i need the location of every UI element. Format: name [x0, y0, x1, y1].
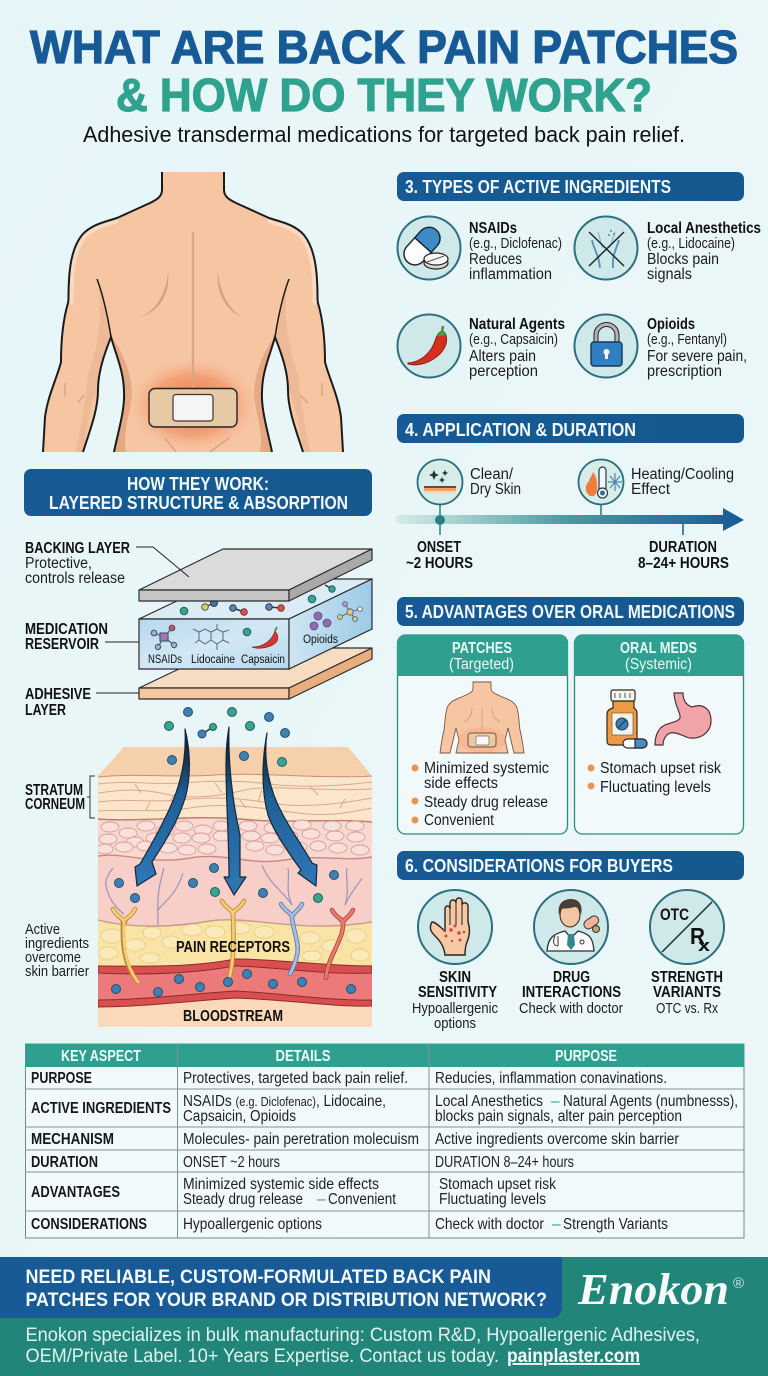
section 4 heading — [397, 414, 744, 443]
logo: Enokon: ® — [733, 1275, 744, 1292]
label: active ingredients: skin barrier — [25, 963, 89, 980]
label: duration: DURATION — [649, 539, 717, 556]
text: strength variants: STRENGTH — [651, 969, 723, 986]
molecules released — [164, 708, 290, 738]
row: active ingredients: Local Anesthetics — [435, 1093, 543, 1110]
epidermis top — [98, 747, 372, 776]
bullets: patches: Minimized systemic — [424, 760, 549, 777]
icon: OTC vs Rx: R — [690, 923, 705, 949]
medication reservoir — [139, 579, 372, 669]
text: clean dry skin: Dry Skin — [470, 481, 521, 498]
bullets: patches: Steady drug release — [424, 794, 548, 811]
label: active ingredients: overcome — [25, 949, 81, 966]
header: how they work — [24, 469, 372, 516]
title: & HOW DO THEY WORK? — [116, 69, 652, 121]
text: opioids: For severe pain, — [647, 348, 747, 365]
call to action banner — [0, 1257, 768, 1376]
text: natural agents — [469, 316, 565, 380]
label: medication reservoir — [25, 621, 108, 653]
header: how they work: LAYERED STRUCTURE & ABSORPTION — [49, 492, 348, 513]
skin cross-section: BLOODSTREAM — [183, 1008, 283, 1025]
row: active ingredients: – — [551, 1093, 560, 1110]
table header: PURPOSE — [555, 1048, 617, 1065]
row: advantages: Minimized systemic side effects — [183, 1176, 379, 1193]
title — [30, 21, 738, 121]
mini back illustration — [440, 682, 524, 753]
label: duration — [638, 539, 729, 572]
CTA body: Enokon specializes in bulk manufacturing: Custom R&D, Hypoallergenic Adhesives, — [26, 1325, 700, 1346]
text: drug interactions: INTERACTIONS — [522, 984, 621, 1001]
icon: NSAID pills — [398, 216, 460, 280]
icon: hand with rash — [418, 890, 492, 964]
section 3 heading — [397, 172, 744, 201]
label: backing layer: BACKING LAYER — [25, 540, 130, 557]
label: active ingredients: Active — [25, 921, 60, 938]
arrow: absorption left — [135, 729, 189, 886]
text: natural agents: (e.g., Capsaicin) — [469, 331, 558, 348]
icon: blocked nerves — [574, 216, 638, 280]
bullets: oral meds: Stomach upset risk — [600, 760, 721, 777]
row: considerations — [31, 1216, 668, 1233]
text: NSAIDs: inflammation — [469, 266, 552, 283]
summary table — [25, 1044, 744, 1238]
text: opioids: prescription — [647, 363, 722, 380]
icon: NSAID molecule — [151, 625, 177, 650]
label: stratum corneum: CORNEUM — [25, 796, 85, 813]
icon: heating and cooling — [578, 460, 624, 504]
arrow: absorption right — [263, 733, 317, 886]
row: mechanism: MECHANISM — [31, 1131, 114, 1148]
label: duration: 8–24+ HOURS — [638, 555, 729, 572]
panel: oral meds: ORAL MEDS — [620, 640, 697, 657]
cell layer — [97, 819, 372, 862]
label: stratum corneum: STRATUM — [25, 782, 83, 799]
icon: pill bottle — [607, 690, 647, 748]
text: drug interactions: Check with doctor — [519, 1000, 623, 1017]
icon: OTC vs Rx: OTC — [660, 905, 689, 924]
panel: patches — [397, 635, 568, 834]
text: strength variants: VARIANTS — [653, 984, 721, 1001]
text: NSAIDs — [469, 220, 562, 283]
label: medication reservoir: RESERVOIR — [25, 636, 99, 653]
fat layer — [98, 919, 372, 966]
bullets: oral meds — [588, 760, 721, 796]
CTA heading: PATCHES FOR YOUR BRAND OR DISTRIBUTION NETWORK? — [26, 1290, 547, 1311]
medication reservoir: Capsaicin — [241, 654, 285, 666]
row: active ingredients: Natural Agents (numbnesss), — [563, 1093, 738, 1110]
label: onset: ~2 HOURS — [406, 555, 473, 572]
icon: clean dry skin — [418, 460, 462, 504]
text: skin sensitivity: SKIN — [439, 969, 471, 986]
title: WHAT ARE BACK PAIN PATCHES — [30, 21, 738, 73]
panel: patches: (Targeted) — [449, 656, 514, 673]
label: adhesive layer: LAYER — [25, 702, 66, 719]
table header — [26, 1044, 744, 1067]
bullets: oral meds: Fluctuating levels — [600, 779, 711, 796]
row: mechanism: Molecules- pain peretration molecuism — [183, 1131, 419, 1148]
text: drug interactions: DRUG — [553, 969, 590, 986]
icon: chili pepper — [398, 314, 460, 378]
row: duration: ONSET ~2 hours — [183, 1154, 280, 1171]
CTA heading: NEED RELIABLE, CUSTOM-FORMULATED BACK PAIN — [26, 1267, 491, 1288]
label: stratum corneum — [25, 776, 95, 818]
row: advantages: Stomach upset risk — [439, 1176, 556, 1193]
text: natural agents: Natural Agents — [469, 316, 565, 333]
row: advantages — [31, 1176, 556, 1208]
medication reservoir: Opioids — [303, 634, 338, 646]
logo: Enokon: Enokon — [577, 1265, 729, 1314]
text: skin sensitivity — [412, 969, 498, 1032]
icon: doctor — [534, 890, 608, 964]
icon: OTC vs Rx: x — [698, 936, 711, 955]
row: active ingredients — [31, 1093, 738, 1125]
text: opioids: Opioids — [647, 316, 695, 333]
section 6 heading: 6. CONSIDERATIONS FOR BUYERS — [405, 855, 673, 876]
row: purpose: PURPOSE — [31, 1070, 92, 1087]
CTA body — [26, 1325, 700, 1367]
row: mechanism: Active ingredients overcome skin barrier — [435, 1131, 679, 1148]
text: skin sensitivity: options — [434, 1015, 476, 1032]
text: opioids — [647, 316, 747, 380]
row: duration: DURATION 8–24+ hours — [435, 1154, 574, 1171]
text: natural agents: perception — [469, 363, 538, 380]
molecules in skin — [112, 752, 356, 996]
text: heating cooling: Effect — [631, 481, 671, 498]
row: advantages: Convenient — [328, 1191, 397, 1208]
timeline arrow — [396, 505, 744, 535]
text: NSAIDs: Reduces — [469, 251, 522, 268]
row: active ingredients: Capsaicin, Opioids — [183, 1108, 296, 1125]
header: how they work: HOW THEY WORK: — [127, 473, 269, 494]
icon: stomach — [655, 693, 711, 745]
adhesive layer — [139, 648, 372, 699]
label: backing layer: controls release — [25, 570, 125, 587]
blood vessel — [98, 959, 372, 1030]
label: adhesive layer — [25, 686, 91, 719]
text: strength variants — [651, 969, 723, 1017]
label: adhesive layer: ADHESIVE — [25, 686, 91, 703]
text: natural agents: Alters pain — [469, 348, 536, 365]
table header: DETAILS — [276, 1048, 330, 1065]
skin cross-section — [97, 727, 372, 1030]
label: active ingredients — [25, 921, 89, 980]
medication reservoir: Lidocaine — [191, 654, 235, 666]
text: skin sensitivity: Hypoallergenic — [412, 1000, 498, 1017]
nerve fibres — [106, 865, 362, 925]
text: heating cooling — [631, 466, 734, 498]
row: considerations: Hypoallergenic options — [183, 1216, 322, 1233]
row: duration: DURATION — [31, 1154, 98, 1171]
bullets: patches: side effects — [424, 775, 498, 792]
label: backing layer — [25, 540, 130, 587]
CTA body: OEM/Private Label. 10+ Years Expertise. Contact us today. — [26, 1346, 499, 1367]
molecules on reservoir top — [180, 585, 335, 615]
leader lines — [96, 547, 189, 693]
row: considerations: Strength Variants — [563, 1216, 668, 1233]
icon: OTC vs Rx — [650, 890, 724, 964]
row: advantages: – — [317, 1191, 326, 1208]
section 6 heading — [397, 851, 744, 880]
text: skin sensitivity: SENSITIVITY — [418, 984, 498, 1001]
row: active ingredients: ACTIVE INGREDIENTS — [31, 1100, 171, 1117]
skin cross-section: PAIN RECEPTORS — [176, 939, 290, 956]
bullets: patches: Convenient — [424, 812, 495, 829]
text: local anesthetics: Blocks pain — [647, 251, 719, 268]
row: considerations: CONSIDERATIONS — [31, 1216, 147, 1233]
text: local anesthetics: (e.g., Lidocaine) — [647, 235, 735, 252]
bullets: patches — [412, 760, 549, 829]
panel: oral meds — [574, 635, 744, 834]
section 3 heading: 3. TYPES OF ACTIVE INGREDIENTS — [405, 176, 671, 197]
panel: patches: PATCHES — [452, 640, 512, 657]
row: considerations: Check with doctor — [435, 1216, 544, 1233]
panel: oral meds: (Systemic) — [625, 656, 692, 673]
CTA heading — [26, 1267, 547, 1311]
section 4 heading: 4. APPLICATION & DURATION — [405, 419, 636, 440]
icon: chili in reservoir — [252, 627, 278, 648]
text: clean dry skin: Clean/ — [470, 466, 514, 483]
medication reservoir: NSAIDs — [148, 654, 182, 666]
label: medication reservoir: MEDICATION — [25, 621, 108, 638]
row: duration — [31, 1154, 574, 1171]
table header: KEY ASPECT — [61, 1048, 141, 1065]
row: purpose — [31, 1070, 667, 1087]
text: clean dry skin — [470, 466, 521, 498]
icon: lock — [574, 314, 638, 378]
text: drug interactions — [519, 969, 623, 1017]
text: NSAIDs: NSAIDs — [469, 220, 517, 237]
arrow: absorption centre — [224, 727, 246, 895]
row: purpose: Protectives, targeted back pain relief. — [183, 1070, 408, 1087]
icon: opioid molecules — [310, 602, 362, 630]
label: active ingredients: ingredients — [25, 935, 89, 952]
label: onset — [406, 539, 473, 572]
row: active ingredients: blocks pain signals, alter pain perception — [435, 1108, 682, 1125]
text: heating cooling: Heating/Cooling — [631, 466, 734, 483]
row: purpose: Reducies, inflammation conavinations. — [435, 1070, 667, 1087]
subtitle: Adhesive transdermal medications for targeted back pain relief. — [83, 122, 685, 147]
section 5 heading — [397, 597, 744, 626]
CTA body: painplaster.com — [507, 1346, 640, 1367]
row: considerations: – — [552, 1216, 561, 1233]
stratum corneum — [98, 774, 372, 822]
backing layer — [139, 549, 372, 601]
patch — [149, 388, 237, 427]
text: local anesthetics — [647, 220, 761, 283]
text: opioids: (e.g., Fentanyl) — [647, 331, 727, 348]
row: advantages: Steady drug release — [183, 1191, 303, 1208]
label: onset: ONSET — [417, 539, 461, 556]
row: advantages: ADVANTAGES — [31, 1184, 120, 1201]
text: strength variants: OTC vs. Rx — [656, 1000, 718, 1017]
text: local anesthetics: signals — [647, 266, 692, 283]
row: active ingredients: NSAIDs (e.g. Diclofenac), Lidocaine, — [183, 1093, 386, 1110]
illustration: back with patch — [43, 172, 343, 455]
label: backing layer: Protective, — [25, 555, 92, 572]
icon: lidocaine molecule — [193, 624, 229, 650]
text: NSAIDs: (e.g., Diclofenac) — [469, 235, 562, 252]
row: advantages: Fluctuating levels — [439, 1191, 546, 1208]
row: mechanism — [31, 1131, 679, 1148]
icon: receptors — [113, 901, 353, 982]
